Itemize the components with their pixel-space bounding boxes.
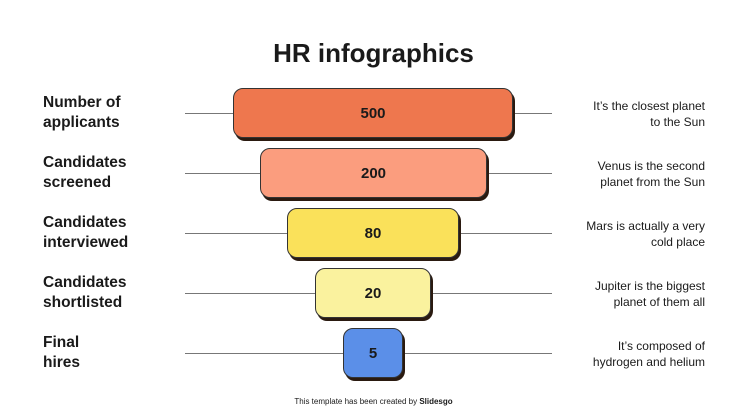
desc 5 (593, 339, 705, 369)
desc 4: planet of them all (614, 295, 705, 309)
desc 2: planet from the Sun (600, 175, 705, 189)
label 5 (43, 334, 80, 371)
box 80 (287, 208, 459, 258)
row 3 (43, 208, 705, 261)
label 3: interviewed (43, 234, 128, 251)
row 2 (43, 148, 705, 201)
label 2 (43, 154, 127, 191)
box 20: 20 (365, 284, 381, 302)
desc 5: hydrogen and helium (593, 355, 705, 369)
box 500: 500 (360, 104, 386, 122)
label 4: shortlisted (43, 294, 122, 311)
label 5: Final (43, 334, 79, 351)
desc 3: Mars is actually a very (586, 219, 705, 233)
desc 2 (598, 159, 705, 189)
box 200 (260, 148, 487, 198)
desc 1 (593, 99, 705, 129)
box 500 (233, 88, 513, 138)
label 1: applicants (43, 114, 120, 131)
box 20 (315, 268, 431, 318)
box 200: 200 (361, 164, 386, 182)
label 3 (43, 214, 128, 251)
desc 5: It’s composed of (618, 339, 705, 353)
row 1 (43, 88, 705, 141)
desc 1: It’s the closest planet (593, 99, 705, 113)
box 80: 80 (365, 224, 381, 242)
box 5: 5 (369, 344, 377, 362)
row 5 (43, 328, 705, 381)
desc 4 (595, 279, 705, 309)
desc 2: Venus is the second (598, 159, 705, 173)
label 2: screened (43, 174, 111, 191)
footer: This template has been created by Slidesgo (294, 397, 453, 406)
label 2: Candidates (43, 154, 127, 171)
desc 3: cold place (651, 235, 705, 249)
label 4 (43, 274, 127, 311)
label 4: Candidates (43, 274, 127, 291)
desc 4: Jupiter is the biggest (595, 279, 705, 293)
desc 1: to the Sun (650, 115, 705, 129)
box 5 (343, 328, 403, 378)
desc 3 (586, 219, 705, 249)
label 1 (43, 94, 121, 131)
label 1: Number of (43, 94, 120, 111)
label 3: Candidates (43, 214, 127, 231)
label 5: hires (43, 354, 80, 371)
title: HR infographics (273, 38, 474, 68)
row 4 (43, 268, 705, 321)
